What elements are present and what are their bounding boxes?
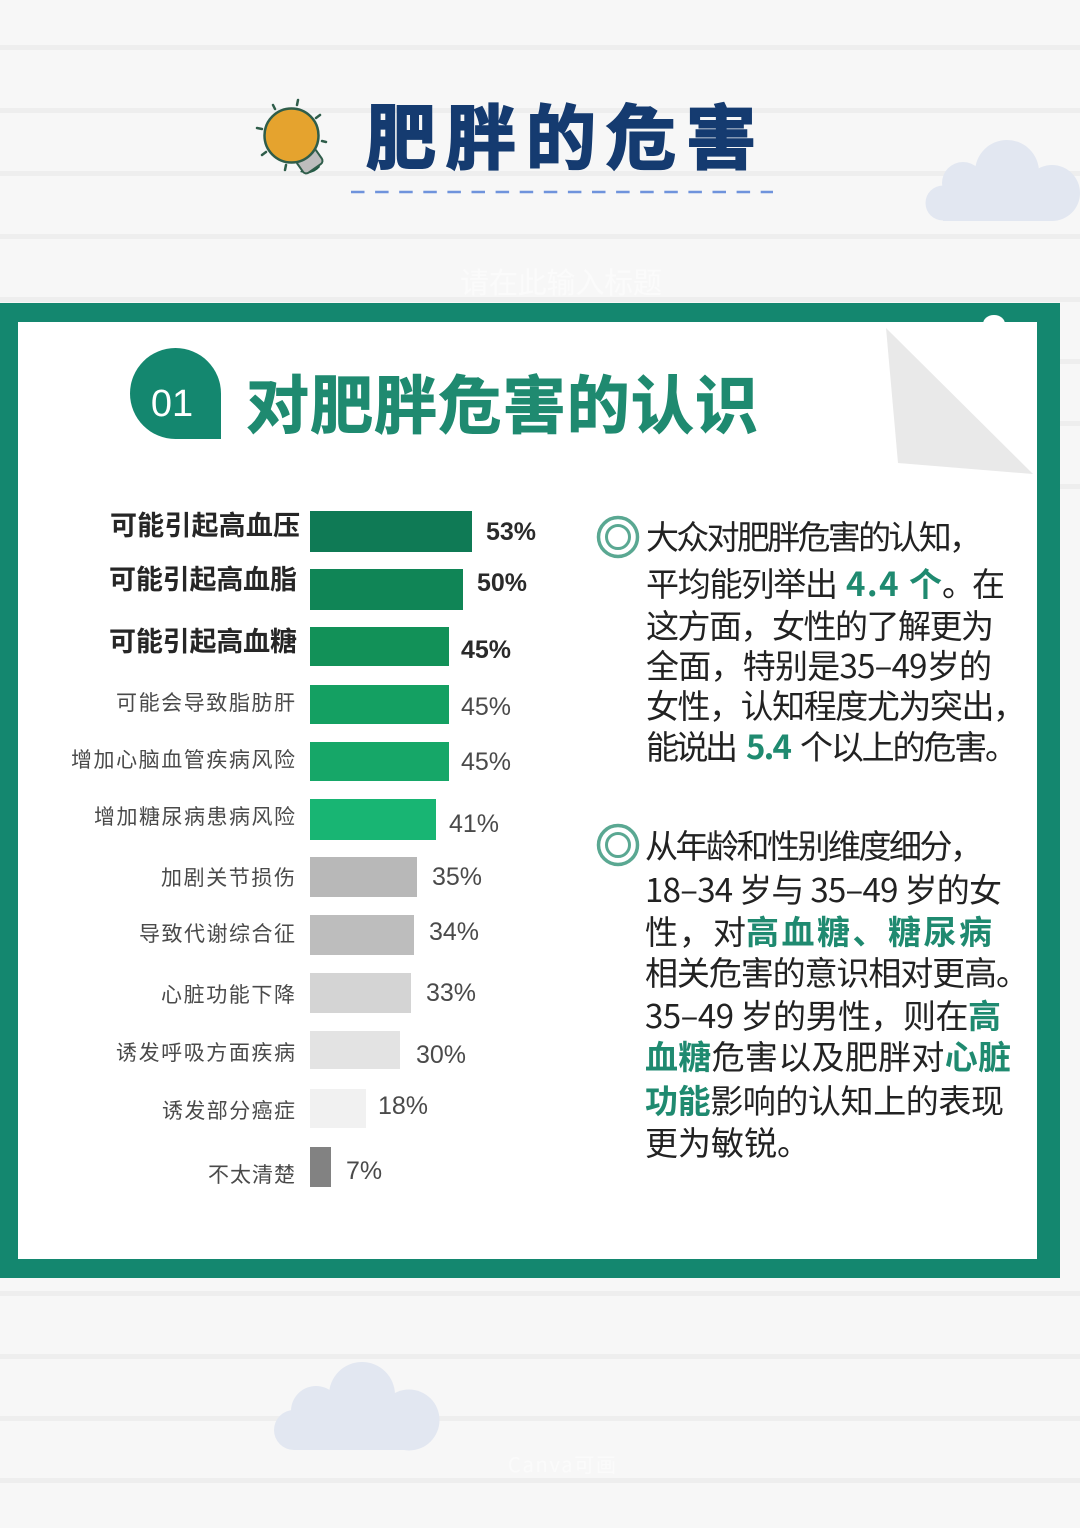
faint watermark: Canva可画 [508, 1449, 616, 1478]
bar: metabolic syndrome: 34% [429, 918, 479, 946]
bar: cardiovascular: 增加心脑血管疾病风险 [71, 749, 295, 772]
text block: paragraph 1: 能说出 [646, 721, 738, 769]
text block: paragraph 2: 更为敏锐。 [645, 1117, 810, 1165]
bar: respiratory: 诱发呼吸方面疾病 [116, 1042, 295, 1065]
panel: awareness of obesity hazards [0, 303, 1060, 1278]
bar: fatty liver [116, 685, 511, 724]
bar: metabolic syndrome: 导致代谢综合征 [139, 923, 295, 946]
text block: paragraph 1: 个以上的危害。 [800, 721, 1018, 769]
bar: high blood pressure [110, 511, 536, 552]
bar: cancer: 诱发部分癌症 [162, 1100, 295, 1123]
bar: fatty liver: 45% [461, 693, 511, 721]
bar: high blood pressure: 53% [486, 518, 536, 546]
bar: high blood sugar [109, 627, 511, 666]
text block: paragraph 1: 平均能列举出 [646, 558, 838, 606]
bar chart [71, 511, 536, 1187]
bar: fatty liver: 可能会导致脂肪肝 [116, 692, 295, 715]
bar: joint damage [161, 857, 482, 897]
section heading: 对肥胖危害的认识 [246, 356, 758, 447]
text block: paragraph 1: 这方面，女性的了解更为 [646, 600, 994, 648]
text block: paragraph 1: 全面，特别是35–49岁的 [646, 640, 992, 688]
icon: light bulb [257, 100, 326, 175]
bar: high blood pressure: 可能引起高血压 [110, 511, 300, 541]
title dashed underline [351, 191, 773, 193]
icon: ring bullet 2 [598, 826, 638, 864]
title: 肥胖的危害 [366, 83, 756, 184]
text block: paragraph 1: 4.4 个 [846, 558, 942, 606]
bar: diabetes: 增加糖尿病患病风险 [94, 806, 295, 829]
text block: paragraph 1 [646, 511, 1026, 769]
section number badge: 01 [151, 383, 193, 425]
text block: paragraph 2: 性，对 [645, 906, 746, 954]
bar: unclear: 不太清楚 [208, 1164, 295, 1187]
section number badge [130, 348, 221, 439]
bar: joint damage: 35% [432, 863, 482, 891]
text block: paragraph 2: 18–34 岁与 35–49 岁的女 [645, 864, 1002, 912]
bar: high blood lipids: 50% [477, 569, 527, 597]
bar: cardiovascular: 45% [461, 748, 511, 776]
bar: cancer [162, 1089, 428, 1128]
text block: paragraph 2: 高血糖、糖尿病 [746, 906, 992, 954]
text block: paragraph 2: 相关危害的意识相对更高。 [645, 947, 1029, 995]
text block: paragraph 2: 血糖危害以及肥胖对心脏 [645, 1031, 1011, 1079]
bar: respiratory [116, 1031, 466, 1069]
bar: high blood lipids: 可能引起高血脂 [109, 565, 297, 595]
bar: diabetes: 41% [449, 810, 499, 838]
bar: unclear: 7% [346, 1157, 382, 1185]
icon: ring bullet 1 [598, 518, 638, 556]
bar: heart function: 33% [426, 979, 476, 1007]
bar: diabetes [94, 799, 499, 840]
text block: paragraph 2: 35–49 岁的男性，则在高 [645, 990, 1001, 1038]
folded paper triangle [886, 328, 1033, 474]
bar: unclear [208, 1147, 382, 1187]
bar: metabolic syndrome [139, 915, 479, 955]
bar: cardiovascular [71, 742, 511, 781]
bar: high blood sugar: 可能引起高血糖 [109, 627, 297, 657]
faint placeholder title: 请在此输入标题 [460, 260, 662, 302]
bar: cancer: 18% [378, 1092, 428, 1120]
bar: heart function [161, 973, 476, 1013]
text block: paragraph 1: 5.4 [746, 721, 792, 769]
text block: paragraph 1: 女性，认知程度尤为突出， [646, 680, 1026, 728]
cloud: bottom [274, 1362, 440, 1450]
bar: high blood lipids [109, 565, 527, 610]
text block: paragraph 1: 。在 [942, 558, 1005, 606]
cloud: top right [926, 140, 1080, 221]
bar: heart function: 心脏功能下降 [161, 984, 295, 1007]
text block: paragraph 1: 大众对肥胖危害的认知， [646, 511, 982, 559]
text block: paragraph 2: 功能影响的认知上的表现 [645, 1075, 1004, 1123]
bar: joint damage: 加剧关节损伤 [161, 867, 295, 890]
text block: paragraph 2 [645, 820, 1029, 1165]
bar: respiratory: 30% [416, 1041, 466, 1069]
bar: high blood sugar: 45% [461, 636, 511, 664]
text block: paragraph 2: 从年龄和性别维度细分， [645, 820, 983, 868]
